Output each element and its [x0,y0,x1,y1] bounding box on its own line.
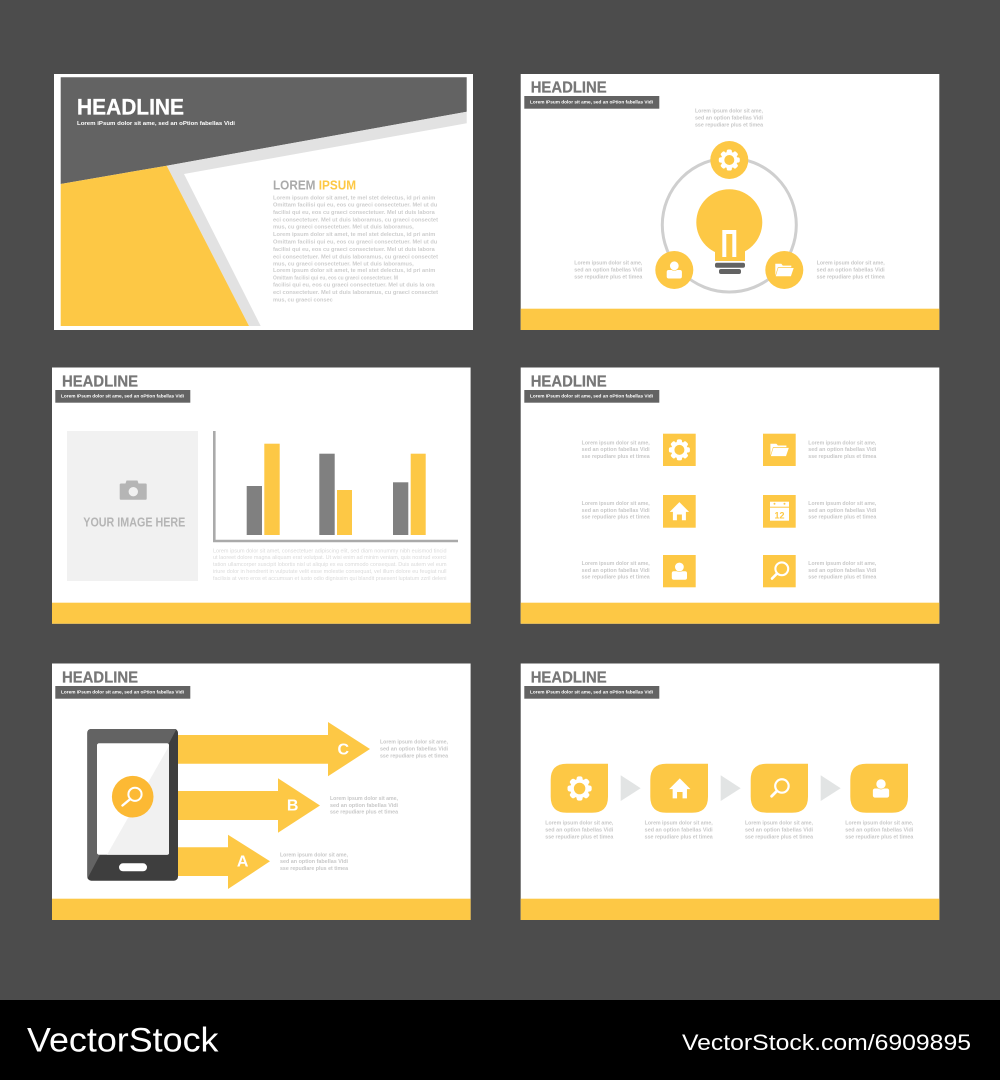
icon: search tile [763,555,796,587]
cover subtitle: Lorem iPsum dolor sit ame, sed an oPtion fabellas Vidi [77,121,235,127]
text: house item: sse repudiare plus et timea [582,515,650,521]
arrow: step 1 to 2 [621,775,641,801]
text: house item [582,501,650,521]
text: step 3: Lorem ipsum dolor sit ame, [745,821,814,827]
left text: sse repudiare plus et timea [574,274,642,280]
headline: HEADLINE [531,374,607,391]
text: person item: Lorem ipsum dolor sit ame, [582,561,650,567]
cover body text: mus, cu graeci consectetuer. Mel ut duis laboramus, [273,225,414,231]
text: search item: sed an option fabellas Vidi [808,568,877,574]
icon: gear node [710,141,748,179]
cover body text: Lorem ipsum dolor sit amet, te mel stet delectus, id pri anim [273,195,435,201]
text: house item: Lorem ipsum dolor sit ame, [582,501,650,507]
cover body text: eci consectetuer. Mel ut duis laboramus, cu graeci consectet [273,290,438,296]
cover body text: Omittam facilisi qui eu, eos cu graeci consectetuer. Mel ut du [273,203,438,209]
text: arrow B: sse repudiare plus et timea [330,810,398,816]
cover body text: Omittam facilisi qui eu, eos cu graeci consectetuer. Mel ut du [273,239,438,245]
text: arrow B: Lorem ipsum dolor sit ame, [330,796,399,802]
text: step 1: sed an option fabellas Vidi [545,828,614,834]
chart caption text: facilisis at vero eros et accumsan et iusto odio dignissim qui blandit praesent luptatum zzril deleni [213,576,446,582]
text: arrow C: sed an option fabellas Vidi [380,746,449,752]
icon: camera [120,480,147,500]
chart caption text: Lorem ipsum dolor sit amet, consectetuer adipiscing elit, sed diam nonummy nibh euismod tincid [213,548,447,554]
subtitle bar [55,686,190,699]
top text: sse repudiare plus et timea [695,122,763,128]
footer bar [521,603,939,624]
step 3: search [751,764,808,813]
text: step 2: Lorem ipsum dolor sit ame, [645,821,713,827]
text: arrow C: Lorem ipsum dolor sit ame, [380,740,449,746]
text: folder item: sed an option fabellas Vidi [808,447,877,453]
icon: calendar tile [763,495,796,528]
dark header shape [61,77,467,184]
text: calendar item: Lorem ipsum dolor sit ame, [808,501,877,507]
footer bar [52,899,471,920]
arrow C [178,722,370,776]
text: step 3: sed an option fabellas Vidi [745,828,814,834]
cover body text: facilisi qui eu, eos cu graeci consectetuer. Mel ut duis labora [273,247,436,253]
text: step 2: sed an option fabellas Vidi [645,828,713,834]
headline: HEADLINE [531,670,607,687]
subtitle bar [524,390,659,403]
step 4: person [850,764,908,813]
text: folder item [808,440,877,460]
right text: Lorem ipsum dolor sit ame, [817,261,885,267]
subtitle bar: Lorem iPsum dolor sit ame, sed an oPtion fabellas Vidi [530,394,653,400]
text: step 3 [745,821,814,840]
chart caption text: tation ullamcorper suscipit lobortis nisl ut aliquip ex ea commodo consequat. Duis autem vel eum [213,562,446,568]
lorem ipsum heading: LOREM IPSUM [273,178,356,192]
cover body text: facilisi qui eu, eos cu graeci consectetuer. Mel ut duis labora [273,210,436,216]
panel: image and bar chart slide [52,368,471,624]
left text: Lorem ipsum dolor sit ame, [574,261,643,267]
text: step 4: sse repudiare plus et timea [845,834,913,840]
left text: sed an option fabellas Vidi [574,268,643,274]
chart caption text: iriure dolor in hendrerit in vulputate velit esse molestie consequat, vel illum dolore eu feugiat null [213,569,446,575]
text: step 2: sse repudiare plus et timea [645,834,713,840]
arrow: step 2 to 3 [721,775,741,801]
text: step 1: sse repudiare plus et timea [545,834,613,840]
text: step 4 [845,821,914,840]
icon: folder node [765,251,803,289]
text: calendar item [808,501,877,521]
right text: sse repudiare plus et timea [817,274,885,280]
arrow A: A [237,854,249,871]
text: person item: sse repudiare plus et timea [582,575,650,581]
text: arrow A: sse repudiare plus et timea [280,866,348,872]
cover body text: mus, cu graeci consec [273,297,333,303]
text: arrow A: Lorem ipsum dolor sit ame, [280,852,349,858]
panel: lightbulb cycle slide [521,74,939,330]
footer bar [521,899,939,920]
footer: watermark strip [0,1000,1000,1080]
left text [574,261,643,280]
text: arrow C [380,740,449,759]
panel: process flow slide [521,664,939,920]
chart caption text: ut laoreet dolore magna aliquam erat volutpat. Ut wisi enim ad minim veniam, quis nostrud exerci [213,555,446,561]
icon: gear tile [663,434,696,466]
text: arrow A [280,852,349,872]
text: arrow C: sse repudiare plus et timea [380,753,448,759]
text: search item: sse repudiare plus et timea [808,575,876,581]
cover body text: facilisi qui eu, eos cu graeci consectetuer. Mel ut duis la ora [273,283,436,289]
arrow B [178,778,320,833]
brand name: VectorStock [27,1021,220,1059]
cover body text: mus, cu graeci consectetuer. Mel ut duis laboramus, [273,262,414,268]
icon: search badge [112,776,154,818]
bar chart [214,431,458,541]
text: gear item: sse repudiare plus et timea [582,454,650,460]
text: calendar item: sse repudiare plus et timea [808,515,876,521]
headline: HEADLINE [62,374,138,391]
icon: person tile [663,555,696,587]
text: step 4: sed an option fabellas Vidi [845,828,914,834]
subtitle bar: Lorem iPsum dolor sit ame, sed an oPtion fabellas Vidi [530,100,653,106]
top text: Lorem ipsum dolor sit ame, [695,109,764,115]
subtitle bar: Lorem iPsum dolor sit ame, sed an oPtion fabellas Vidi [61,394,184,400]
step 1: gear [551,764,608,813]
top text: sed an option fabellas Vidi [695,116,764,122]
step 2: house [650,764,708,813]
text: house item: sed an option fabellas Vidi [582,508,650,514]
image reference: VectorStock.com/6909895 [682,1030,971,1055]
footer bar [52,603,471,624]
text: folder item: Lorem ipsum dolor sit ame, [808,440,877,446]
headline: HEADLINE [62,670,138,687]
icon: light bulb [696,189,762,274]
right text: sed an option fabellas Vidi [817,268,885,274]
text: folder item: sse repudiare plus et timea [808,454,876,460]
icon: house tile [663,495,696,528]
cover body text: Lorem ipsum dolor sit amet, te mel stet delectus, id pri anim [273,268,435,274]
arrow A [178,835,270,889]
text: gear item [582,440,650,460]
image placeholder [67,431,198,581]
top text [695,109,764,128]
subtitle bar: Lorem iPsum dolor sit ame, sed an oPtion fabellas Vidi [530,690,653,696]
cover body text [273,195,438,303]
right text [817,261,885,280]
footer bar [521,309,939,330]
text: step 4: Lorem ipsum dolor sit ame, [845,821,914,827]
text: step 3: sse repudiare plus et timea [745,834,813,840]
cover body text: Lorem ipsum dolor sit amet, te mel stet delectus, id pri anim [273,232,435,238]
text: step 1: Lorem ipsum dolor sit ame, [545,821,614,827]
cover body text: eci consectetuer. Mel ut duis laboramus, cu graeci consectet [273,254,438,260]
text: arrow B: sed an option fabellas Vidi [330,803,399,809]
panel: cover slide [54,74,473,330]
cover body text: Omittam facilisi qui eu, eos cu graeci consectetuer. M [273,275,398,281]
yellow shape [61,166,249,326]
text: search item [808,561,877,581]
text: arrow B [330,796,399,816]
text: gear item: Lorem ipsum dolor sit ame, [582,440,650,446]
panel: six icon list slide [521,368,939,624]
icon: person node [655,251,693,289]
text: calendar item: sed an option fabellas Vidi [808,508,877,514]
subtitle bar [524,96,659,109]
headline: HEADLINE [531,80,607,97]
text: arrow A: sed an option fabellas Vidi [280,859,349,865]
subtitle bar: Lorem iPsum dolor sit ame, sed an oPtion fabellas Vidi [61,690,184,696]
text: step 1 [545,821,614,840]
text: person item [582,561,650,581]
text: gear item: sed an option fabellas Vidi [582,447,650,453]
light grey angled band [167,112,467,326]
subtitle bar [55,390,190,403]
arrow B: B [287,798,298,815]
cover headline: HEADLINE [77,94,184,119]
cover body text: eci consectetuer. Mel ut duis laboramus, cu graeci consectet [273,217,438,223]
panel: phone and arrows slide [52,664,471,920]
cycle ring [662,158,796,292]
text: step 2 [645,821,713,840]
icon: smartphone [87,729,178,881]
placeholder label: YOUR IMAGE HERE [83,516,185,530]
text: person item: sed an option fabellas Vidi [582,568,650,574]
arrow: step 3 to 4 [821,775,841,801]
text: search item: Lorem ipsum dolor sit ame, [808,561,877,567]
icon: folder tile [763,434,796,466]
icon: calendar tile: 12 [774,510,785,520]
chart caption text [213,548,447,582]
arrow C: C [338,742,350,759]
subtitle bar [524,686,659,699]
